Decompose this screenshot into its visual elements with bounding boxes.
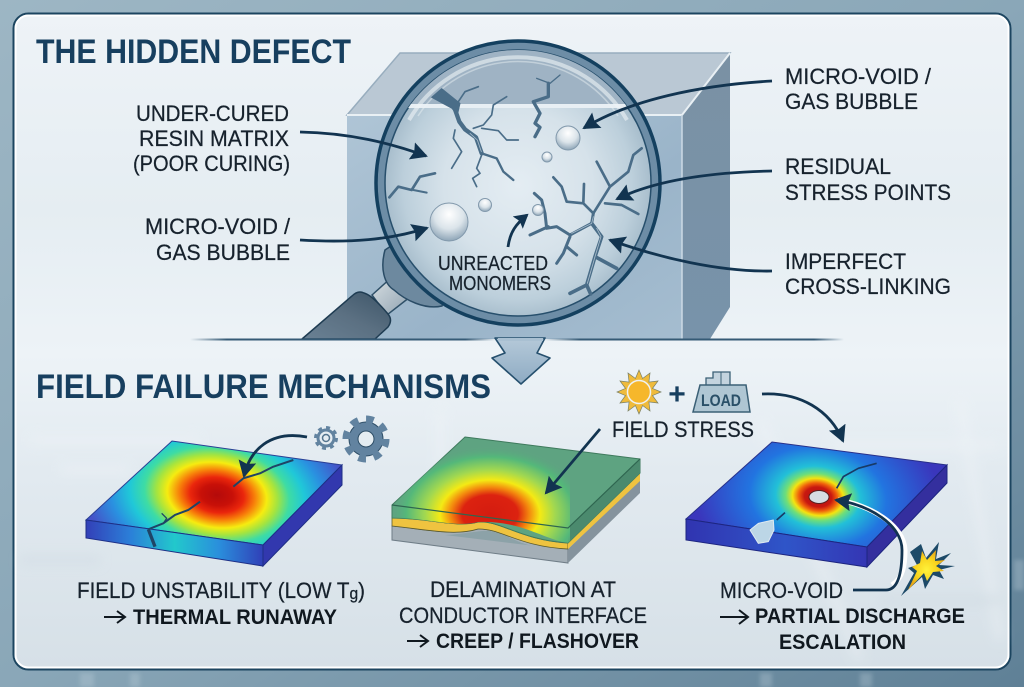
label: imperfect cross-linking: IMPERFECT xyxy=(785,249,906,274)
caption: delamination: DELAMINATION AT xyxy=(430,577,616,602)
icon: load weight xyxy=(693,372,750,412)
caption: partial discharge xyxy=(720,578,965,654)
icon: spark xyxy=(901,542,955,596)
plus sign: + xyxy=(668,378,686,411)
title: the hidden defect: THE HIDDEN DEFECT xyxy=(36,33,351,71)
caption: partial discharge: PARTIAL DISCHARGE xyxy=(755,604,965,628)
caption: thermal runaway: ) xyxy=(358,578,365,603)
label: residual stress points xyxy=(785,154,951,205)
arrow: micro-void to hotspot xyxy=(836,500,905,590)
icon: load weight: LOAD xyxy=(701,391,741,410)
caption: partial discharge: MICRO-VOID xyxy=(720,578,843,603)
plate 3: partial discharge xyxy=(686,442,947,567)
icon: gears xyxy=(316,420,386,458)
divider with down arrow xyxy=(190,338,844,384)
caption: delamination: CREEP / FLASHOVER xyxy=(436,629,639,653)
plate 1: thermal runaway xyxy=(86,441,342,566)
plate 2: delamination xyxy=(392,437,640,563)
section: the hidden defect illustration xyxy=(302,41,730,339)
arrow: gears to hotspot xyxy=(244,436,307,476)
label: field stress: FIELD STRESS xyxy=(612,417,754,442)
label: micro-void left xyxy=(145,214,291,265)
label: micro-void left: GAS BUBBLE xyxy=(156,240,290,265)
resin block xyxy=(347,53,730,339)
label: imperfect cross-linking: CROSS-LINKING xyxy=(785,274,951,299)
caption: delamination xyxy=(399,577,647,653)
caption: thermal runaway xyxy=(77,578,365,629)
label: imperfect cross-linking xyxy=(785,249,951,299)
title: field failure mechanisms: FIELD FAILURE MECHANISMS xyxy=(36,368,491,406)
cracks xyxy=(389,75,642,294)
caption: thermal runaway: g xyxy=(349,584,358,603)
arrow: load to plate 3 xyxy=(762,394,843,441)
label: unreacted monomers: MONOMERS xyxy=(449,272,551,295)
label: under-cured resin matrix: RESIN MATRIX xyxy=(139,126,289,151)
label: unreacted monomers: UNREACTED xyxy=(438,252,548,275)
icon: sun xyxy=(617,370,661,414)
label: under-cured resin matrix: UNDER-CURED xyxy=(136,101,289,126)
label: residual stress points: RESIDUAL xyxy=(785,154,891,179)
caption: delamination: CONDUCTOR INTERFACE xyxy=(399,603,647,628)
label: unreacted monomers xyxy=(438,252,551,295)
label: under-cured resin matrix xyxy=(133,101,290,176)
label: micro-void right xyxy=(785,64,932,114)
bubbles xyxy=(430,126,580,241)
magnifying lens xyxy=(376,41,660,325)
magnifying glass handle xyxy=(302,240,450,339)
label: micro-void left: MICRO-VOID / xyxy=(145,214,291,239)
caption: partial discharge: ESCALATION xyxy=(779,630,906,654)
label: micro-void right: MICRO-VOID / xyxy=(785,64,932,89)
label: under-cured resin matrix: (POOR CURING) xyxy=(133,151,290,176)
caption: thermal runaway: FIELD UNSTABILITY (LOW T xyxy=(77,578,375,603)
caption: thermal runaway: THERMAL RUNAWAY xyxy=(133,605,337,629)
label: residual stress points: STRESS POINTS xyxy=(785,180,951,205)
label: micro-void right: GAS BUBBLE xyxy=(785,89,918,114)
callout arrows: defect labels xyxy=(300,81,772,271)
arrow: field stress to delamination xyxy=(546,429,600,493)
